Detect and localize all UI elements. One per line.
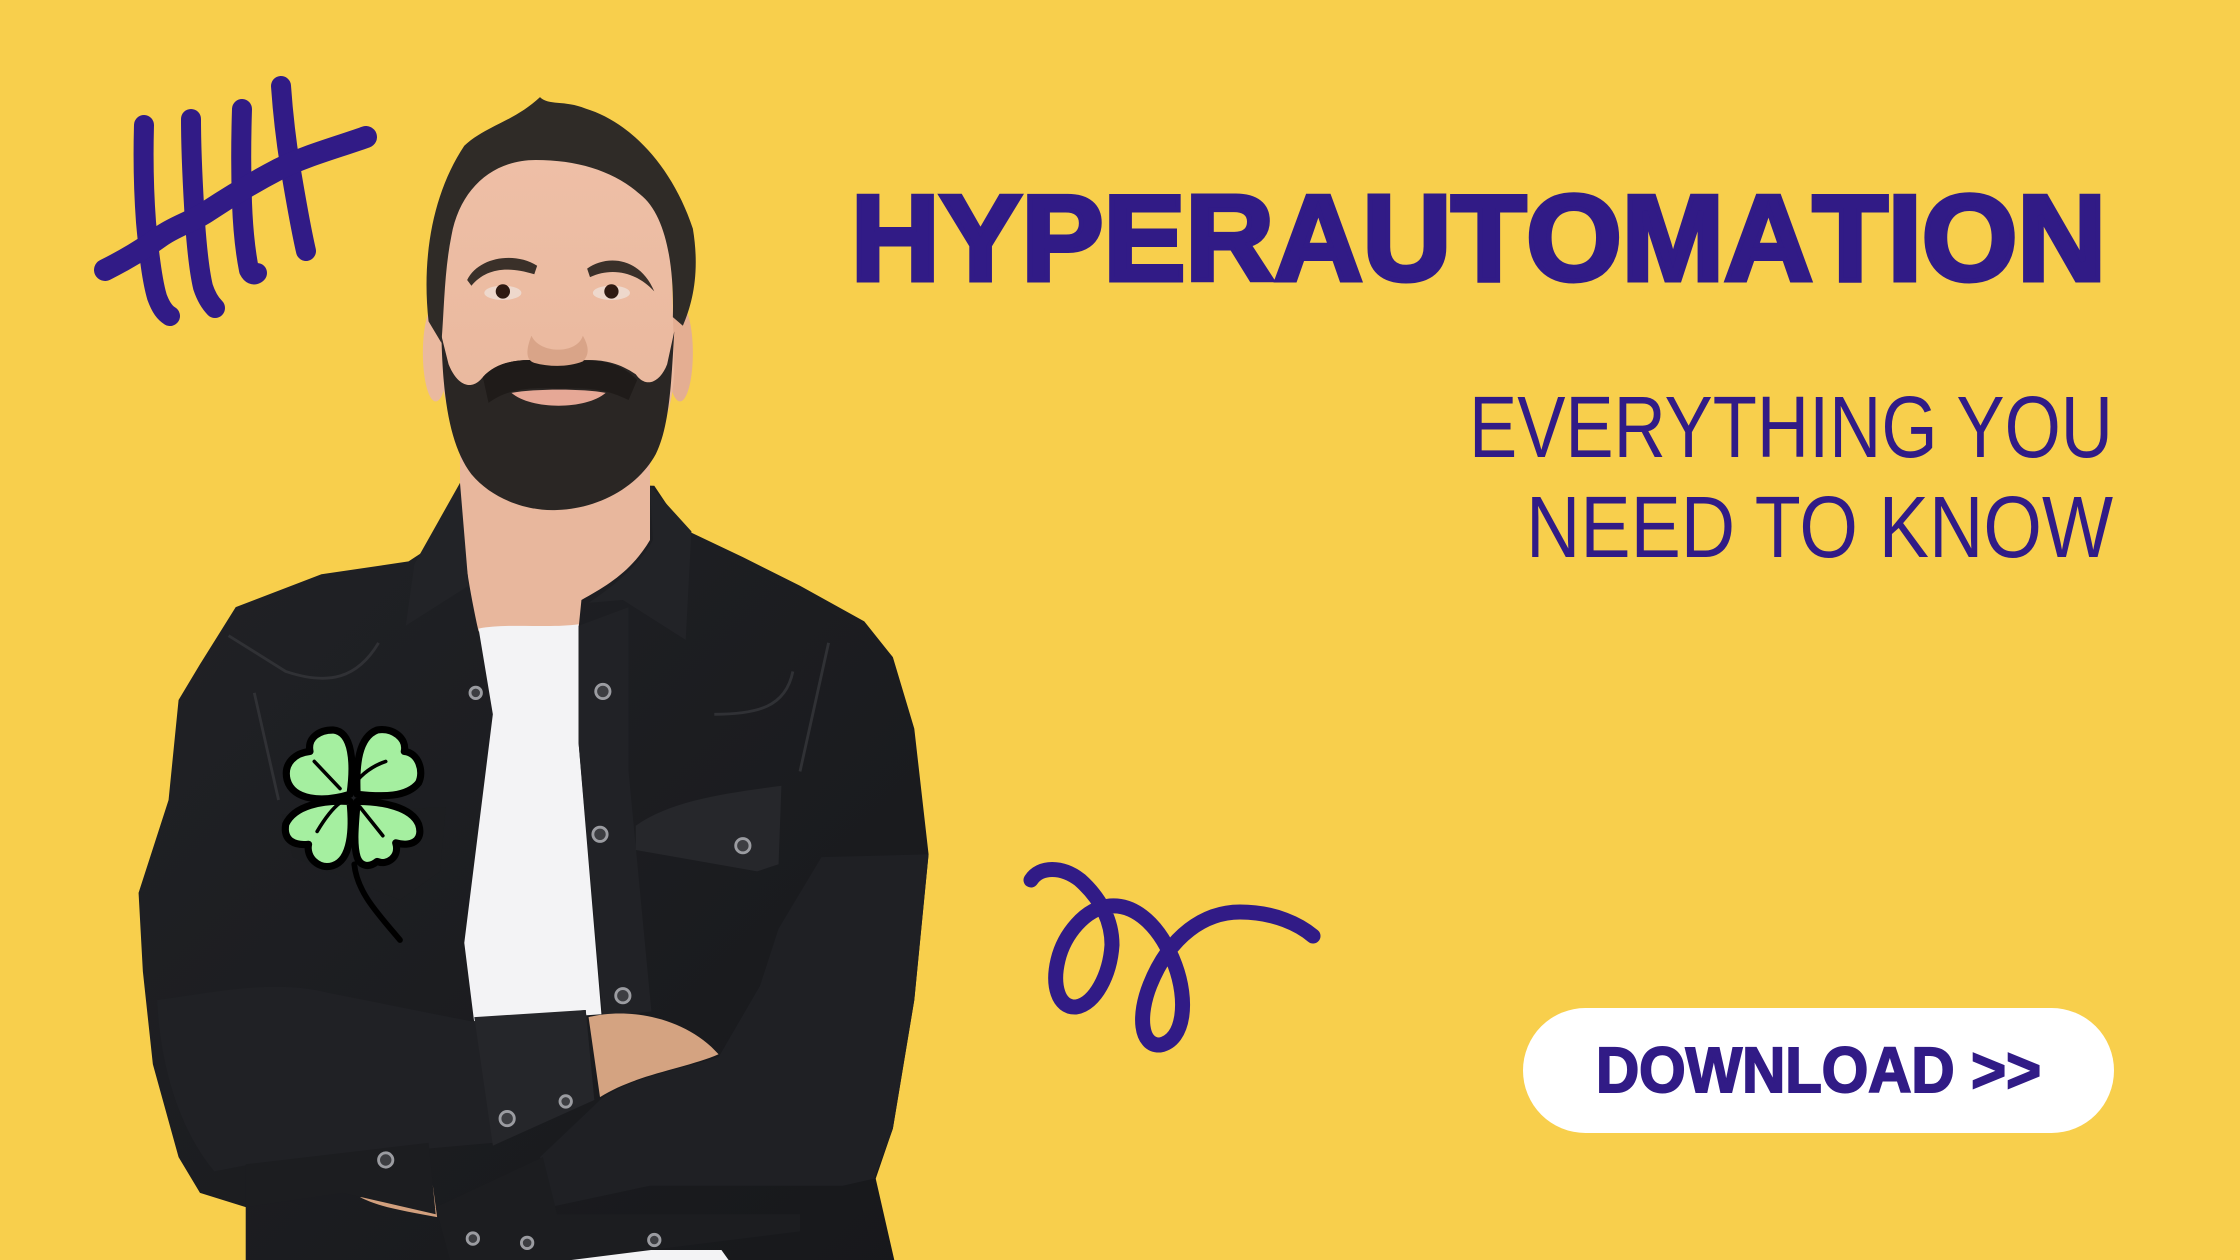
title: HYPERAUTOMATION (851, 170, 2106, 306)
clover veins (314, 761, 386, 836)
forearm right (540, 854, 929, 1207)
collar right (589, 486, 691, 640)
lower hand (360, 1186, 437, 1217)
nose shadow (527, 336, 588, 366)
pocket left (281, 807, 446, 900)
icon: squiggle (1031, 870, 1313, 1045)
download button (1523, 1008, 2114, 1133)
lower sleeve (436, 1157, 800, 1260)
subtitle (1469, 379, 2113, 576)
ear right (667, 304, 693, 401)
button label: DOWNLOAD >> (1596, 1034, 2041, 1106)
clover stem (354, 864, 400, 940)
t-shirt hem (560, 1250, 729, 1260)
mouth (511, 390, 606, 406)
subtitle line 1: EVERYTHING YOU (1469, 379, 2113, 476)
moustache (483, 360, 637, 403)
hair (427, 97, 696, 343)
t-shirt (464, 624, 601, 1023)
jacket (139, 483, 929, 1260)
eyebrow left (467, 258, 537, 286)
icon: tally marks (105, 86, 366, 316)
subtitle line 2: NEED TO KNOW (1526, 479, 2113, 576)
placket (579, 607, 651, 1017)
buttons (379, 684, 750, 1249)
pocket right (636, 786, 781, 871)
ear left (423, 304, 449, 401)
button pill (1523, 1008, 2114, 1133)
hand (589, 1013, 719, 1097)
eyebrow right (587, 260, 654, 291)
icon: four-leaf clover (285, 730, 421, 940)
cuff (474, 1010, 594, 1146)
shadow under arm (246, 1143, 436, 1214)
neck (460, 386, 650, 631)
face (441, 157, 674, 503)
eye left (484, 284, 521, 300)
eye right (593, 284, 630, 300)
forearm left (157, 987, 594, 1171)
yoke seams (229, 636, 829, 800)
collar left (406, 483, 469, 626)
photo: man with crossed arms (139, 97, 929, 1260)
beard (441, 331, 674, 510)
